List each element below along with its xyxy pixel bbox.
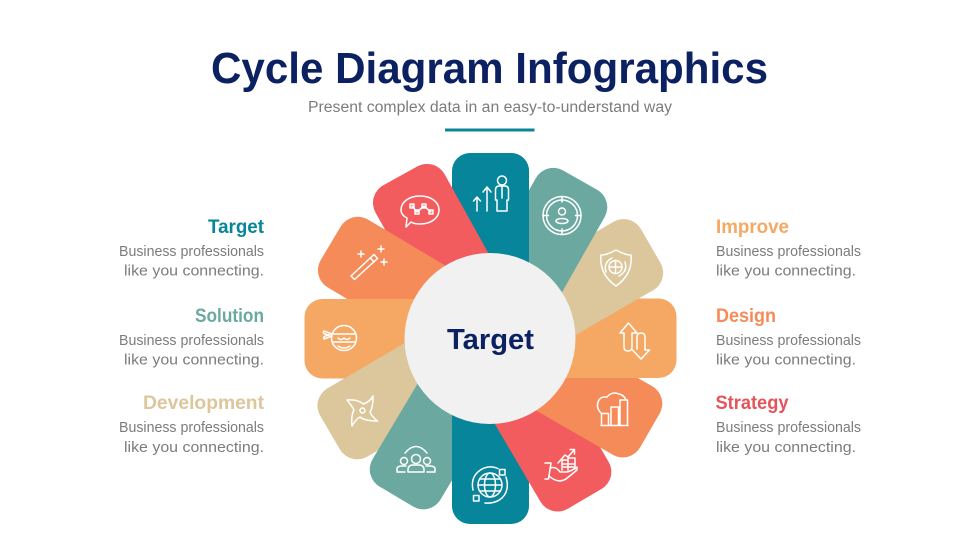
title: Cycle Diagram Infographics [211,44,768,93]
text block: Solution: like you connecting. [124,352,264,368]
icon: shield with globe [601,250,631,286]
text block: Improve [716,217,861,280]
icon: hand holding coins with growth arrow [545,450,577,481]
icon: cloud with bar chart [597,393,628,426]
text block: Design: like you connecting. [716,352,856,368]
text block: Development: like you connecting. [124,439,264,456]
icon: shuriken throwing star [347,396,378,426]
icon: speech bubble with zigzag nodes [401,196,439,227]
panel: cycle petals [304,153,676,524]
text block: Improve: Business professionals [716,243,861,260]
text block: Design [716,306,861,368]
text block: Design: Design [716,306,776,327]
text block: Target [119,217,265,280]
title underline accent [445,128,534,132]
text block: Development: Development [143,393,265,414]
text block: Strategy: Strategy [716,393,789,414]
text block: Target: like you connecting. [124,262,264,280]
icon: ninja head [323,326,356,350]
text block: Development [119,393,265,456]
text block: Improve: Improve [716,217,789,238]
text block: Solution [119,306,264,368]
subtitle: Present complex data in an easy-to-understand way [308,99,672,116]
text block: Strategy [716,393,861,456]
text block: Solution: Solution [195,306,264,327]
text block: Target: Target [208,217,265,238]
text block: Strategy: Business professionals [716,419,861,436]
center hub circle [404,253,576,424]
text block: Development: Business professionals [119,419,264,436]
icon: target crosshair with person [543,196,581,234]
text block: Solution: Business professionals [119,332,264,349]
icon: person with rising arrows [474,176,508,211]
text block: Improve: like you connecting. [716,262,856,280]
center label: Target [447,324,534,356]
icon: magic wand [351,246,387,280]
icon: up and down arrows [620,323,650,359]
text block: Strategy: like you connecting. [716,439,856,456]
text block: Target: Business professionals [119,243,264,260]
icon: globe with orbit [472,467,507,503]
icon: group of people [397,446,435,472]
text block: Design: Business professionals [716,332,861,349]
